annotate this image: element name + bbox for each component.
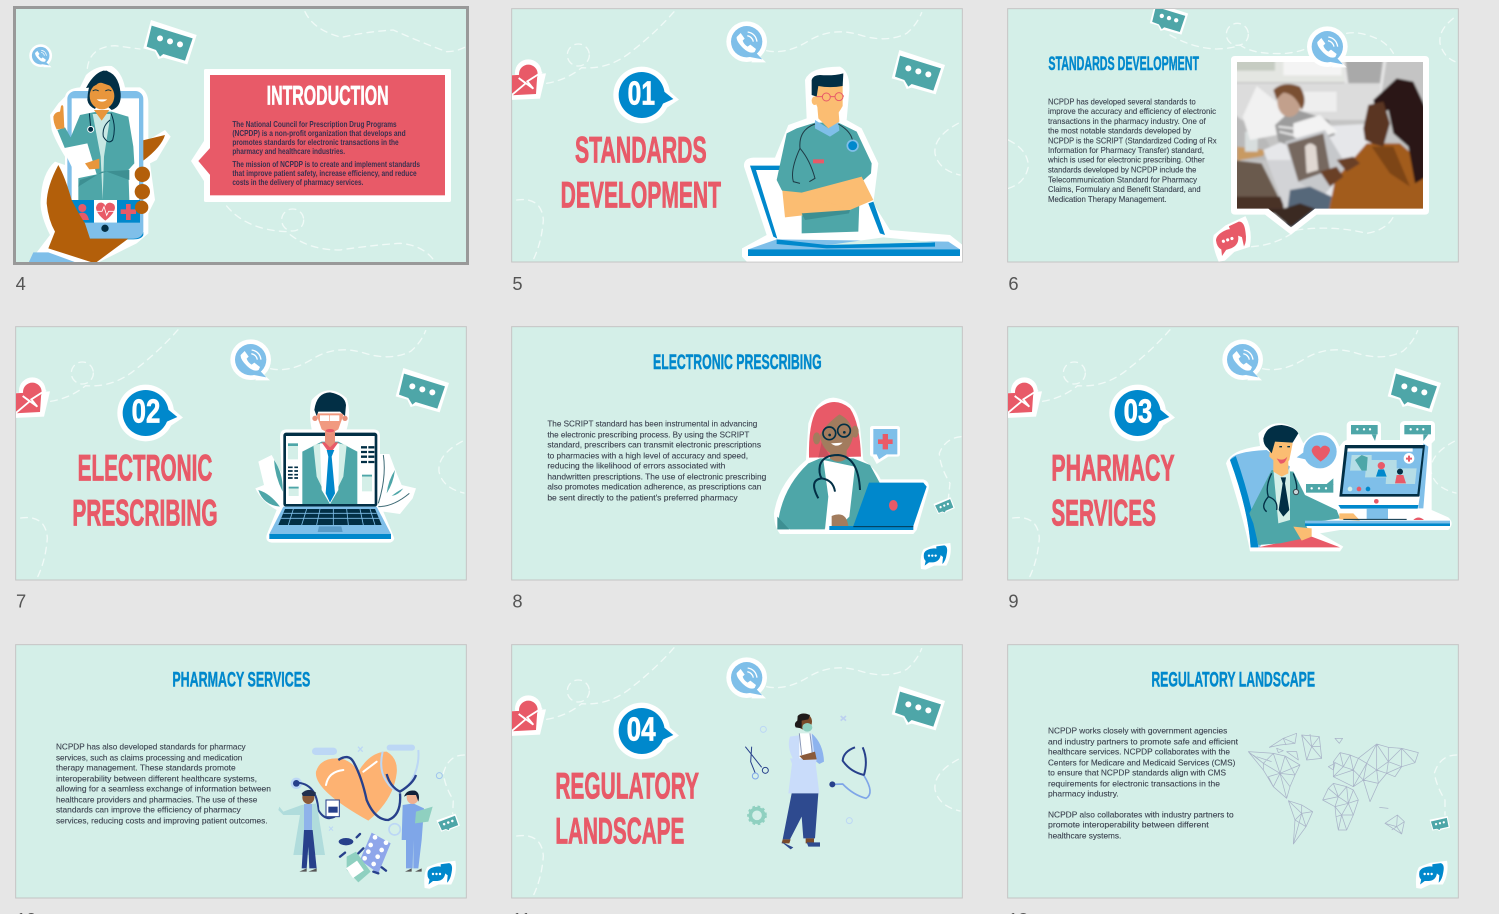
text block: script standard body: to pharmacies with a high level of accuracy and speed, — [547, 451, 748, 461]
heading: pharmacy services: SERVICES — [1051, 492, 1156, 533]
heading: pharmacy services: PHARMACY SERVICES — [172, 668, 310, 692]
text block: script standard body: handwritten prescriptions. The use of electronic prescribing — [547, 472, 767, 482]
panel: slide 10 pharmacy services content — [16, 645, 466, 898]
icon: chat bubble — [1150, 9, 1188, 34]
illustration: doctor in laptop — [742, 67, 963, 262]
icon: chat bubble — [396, 368, 449, 412]
icon: red double chat — [1213, 216, 1251, 262]
icon: phone bubble — [726, 657, 767, 698]
text block: introduction body: (NCPDP) is a non-profit organization that develops and — [232, 128, 406, 138]
text block: standards body: which is used for electronic prescribing. Other — [1047, 155, 1205, 165]
slide number 7: 7 — [16, 590, 26, 611]
text block: script standard body: the electronic prescribing process. By using the SCRIPT — [547, 430, 750, 440]
panel: slide 4 introduction — [14, 7, 467, 294]
text block: standards body: NCPDP is the SCRIPT (Standardized Coding of Rx — [1048, 136, 1217, 146]
heading: electronic prescribing: ELECTRONIC — [78, 447, 212, 488]
illustration: heart stethoscope, doctors and pills — [278, 745, 442, 882]
text block: standards body: Claims, Formulary and Benefit Standard, and — [1048, 184, 1201, 194]
slide number 4: 4 — [16, 273, 26, 294]
text block: pharmacy services body — [56, 742, 271, 826]
heading: regulatory landscape: REGULATORY LANDSCAPE — [1151, 668, 1315, 692]
heading: regulatory landscape: LANDSCAPE — [555, 810, 684, 851]
text block: standards body: the most notable standards developed by — [1048, 126, 1192, 136]
text block: pharmacy services body: NCPDP has also developed standards for pharmacy — [56, 742, 246, 752]
illustration: doctor at computer telehealth — [1226, 421, 1452, 551]
text block: regulatory body: and industry partners to promote safe and efficient — [1048, 737, 1239, 747]
text block: script standard body: reducing the likelihood of errors associated with — [547, 461, 725, 471]
icon: phone bubble — [1222, 339, 1263, 380]
panel: slide 5 standards development section — [508, 9, 963, 294]
section number badge 01: 01 — [628, 75, 655, 112]
text block: pharmacy services body: therapy management. These standards promote — [56, 763, 236, 773]
text block: pharmacy services body: standards can improve the efficiency of pharmacy — [56, 805, 241, 815]
section number badge 04 — [613, 703, 679, 759]
text block: regulatory body: requirements for electronic transactions in the — [1048, 779, 1220, 789]
text block: introduction body: costs in the delivery of pharmacy services. — [232, 177, 363, 187]
text block: standards body — [1047, 97, 1217, 204]
icon: heart mail — [508, 695, 546, 736]
text block: pharmacy services body: healthcare providers and pharmacies. The use of these — [56, 795, 258, 805]
icon: chat bubble — [1388, 368, 1441, 412]
icon: heart mail — [508, 59, 546, 100]
icon: phone bubble — [726, 21, 767, 62]
callout: introduction card — [191, 69, 451, 202]
text block: regulatory body: healthcare systems. — [1048, 831, 1121, 841]
text block: standards body: improve the accuracy and efficiency of electronic — [1048, 106, 1217, 116]
picture: patient video call with caregiver — [1231, 56, 1429, 235]
heading: standards development — [562, 136, 721, 208]
text block: pharmacy services body: services, reducing costs and improving patient outcomes. — [56, 816, 268, 826]
text block: regulatory body: pharmacy industry. — [1048, 789, 1119, 799]
icon: phone bubble — [29, 44, 52, 67]
icon: blue double chat — [921, 543, 951, 570]
section number badge 02 — [117, 385, 183, 441]
icon: chat bubble — [892, 50, 945, 94]
icon: chat bubble — [143, 20, 197, 64]
text block: regulatory body: healthcare services. NCPDP collaborates with the — [1048, 747, 1230, 757]
icon: phone bubble — [1307, 26, 1348, 67]
illustration: doctor on laptop screen — [255, 390, 416, 543]
heading: regulatory landscape — [555, 765, 699, 851]
text block: regulatory body: NCPDP also collaborates with industry partners to — [1048, 810, 1234, 820]
text block: script standard body — [547, 419, 767, 503]
panel: slide 11 regulatory landscape section — [508, 645, 962, 898]
text block: regulatory body: NCPDP works closely with government agencies — [1048, 726, 1228, 736]
section number badge 03: 03 — [1124, 393, 1152, 430]
icon: small chat bubble — [434, 809, 463, 837]
icon: heart mail — [1004, 377, 1042, 418]
heading: standards development: DEVELOPMENT — [561, 174, 721, 215]
text block: standards body: Medication Therapy Management. — [1048, 194, 1167, 204]
heading: pharmacy services: PHARMACY — [1051, 447, 1175, 488]
panel: slide 9 pharmacy services section — [1004, 327, 1458, 611]
text block: regulatory body: Centers for Medicare and Medicaid Services (CMS) — [1048, 758, 1235, 768]
text block: script standard body: The SCRIPT standard has been instrumental in advancing — [547, 419, 757, 429]
section number badge 04: 04 — [627, 711, 656, 748]
slide number 9: 9 — [1008, 590, 1019, 611]
illustration: doctor with laptop — [774, 398, 929, 534]
text block: standards body: Telecommunication Standard for Pharmacy — [1048, 175, 1198, 185]
icon: chat bubble — [892, 686, 945, 730]
heading: regulatory landscape: REGULATORY — [555, 765, 699, 806]
text block: introduction body: The mission of NCPDP is to create and implement standards — [232, 159, 420, 169]
illustration: masked doctor with medical tools — [745, 714, 870, 849]
panel: slide 6 standards development content — [1008, 3, 1458, 294]
heading: electronic prescribing: ELECTRONIC PRESCRIBING — [653, 350, 822, 374]
text block: standards body: transactions in the pharmacy industry. One of — [1048, 116, 1206, 126]
text block: regulatory body — [1048, 726, 1239, 841]
text block: standards body: standards developed by NCPDP include the — [1048, 165, 1196, 175]
slide number 6: 6 — [1008, 273, 1019, 294]
text block: standards body: NCPDP has developed several standards to — [1048, 97, 1196, 107]
text block: introduction body: The National Council for Prescription Drug Programs — [232, 119, 397, 129]
icon: plus speech bubble — [870, 426, 900, 464]
icon: heart mail — [12, 377, 50, 418]
text block: regulatory body: promote interoperability between different — [1048, 820, 1209, 830]
text block: regulatory body: to ensure that NCPDP standards align with CMS — [1048, 768, 1226, 778]
text block: script standard body: standard, prescribers can transmit electronic prescriptions — [547, 440, 762, 450]
text block: introduction body: that improve patient safety, increase efficiency, and reduce — [232, 168, 417, 178]
text block: introduction body: promotes standards for electronic transactions in the — [232, 137, 399, 147]
heading: electronic prescribing — [74, 454, 217, 526]
icon: phone bubble — [230, 339, 271, 380]
slide numbers row 3 (cut off) — [16, 909, 1028, 914]
illustration: doctor on phone held in hand — [28, 66, 171, 263]
panel: slide 8 electronic prescribing content — [512, 327, 962, 611]
slide number 8: 8 — [512, 590, 523, 611]
text block: pharmacy services body: allowing for a seamless exchange of information between — [56, 784, 271, 794]
text block: introduction body: pharmacy and healthcare industries. — [232, 146, 345, 156]
icon: blue double chat — [1416, 861, 1448, 889]
section number badge 02: 02 — [132, 393, 160, 430]
panel: slide 7 electronic prescribing section — [12, 327, 466, 611]
section number badge 01 — [613, 67, 679, 123]
heading: standards development: STANDARDS DEVELOPMENT — [1048, 54, 1199, 75]
text block: pharmacy services body: services, such as claims processing and medication — [56, 753, 243, 763]
text block: standards body: Information for Pharmacy Transfer) standard, — [1048, 145, 1204, 155]
heading: introduction: INTRODUCTION — [267, 81, 389, 111]
chart: low-poly world map — [1248, 733, 1418, 844]
heading: electronic prescribing: PRESCRIBING — [72, 492, 218, 533]
slide number 5: 5 — [512, 273, 523, 294]
text block: script standard body: be sent directly to the patient's preferred pharmacy — [547, 493, 738, 503]
text block: introduction body — [232, 119, 420, 187]
heading: pharmacy services — [1052, 454, 1175, 526]
section number badge 03 — [1109, 385, 1175, 441]
text block: pharmacy services body: interoperability between different healthcare systems, — [56, 774, 257, 784]
panel: slide 12 regulatory landscape content — [1008, 645, 1458, 898]
text block: script standard body: also promotes medication adherence, as prescriptions can — [547, 482, 761, 492]
icon: small chat bubble — [1427, 811, 1453, 836]
icon: small chat bubble — [931, 493, 958, 519]
icon: blue double chat — [424, 861, 456, 889]
heading: standards development: STANDARDS — [575, 129, 707, 170]
